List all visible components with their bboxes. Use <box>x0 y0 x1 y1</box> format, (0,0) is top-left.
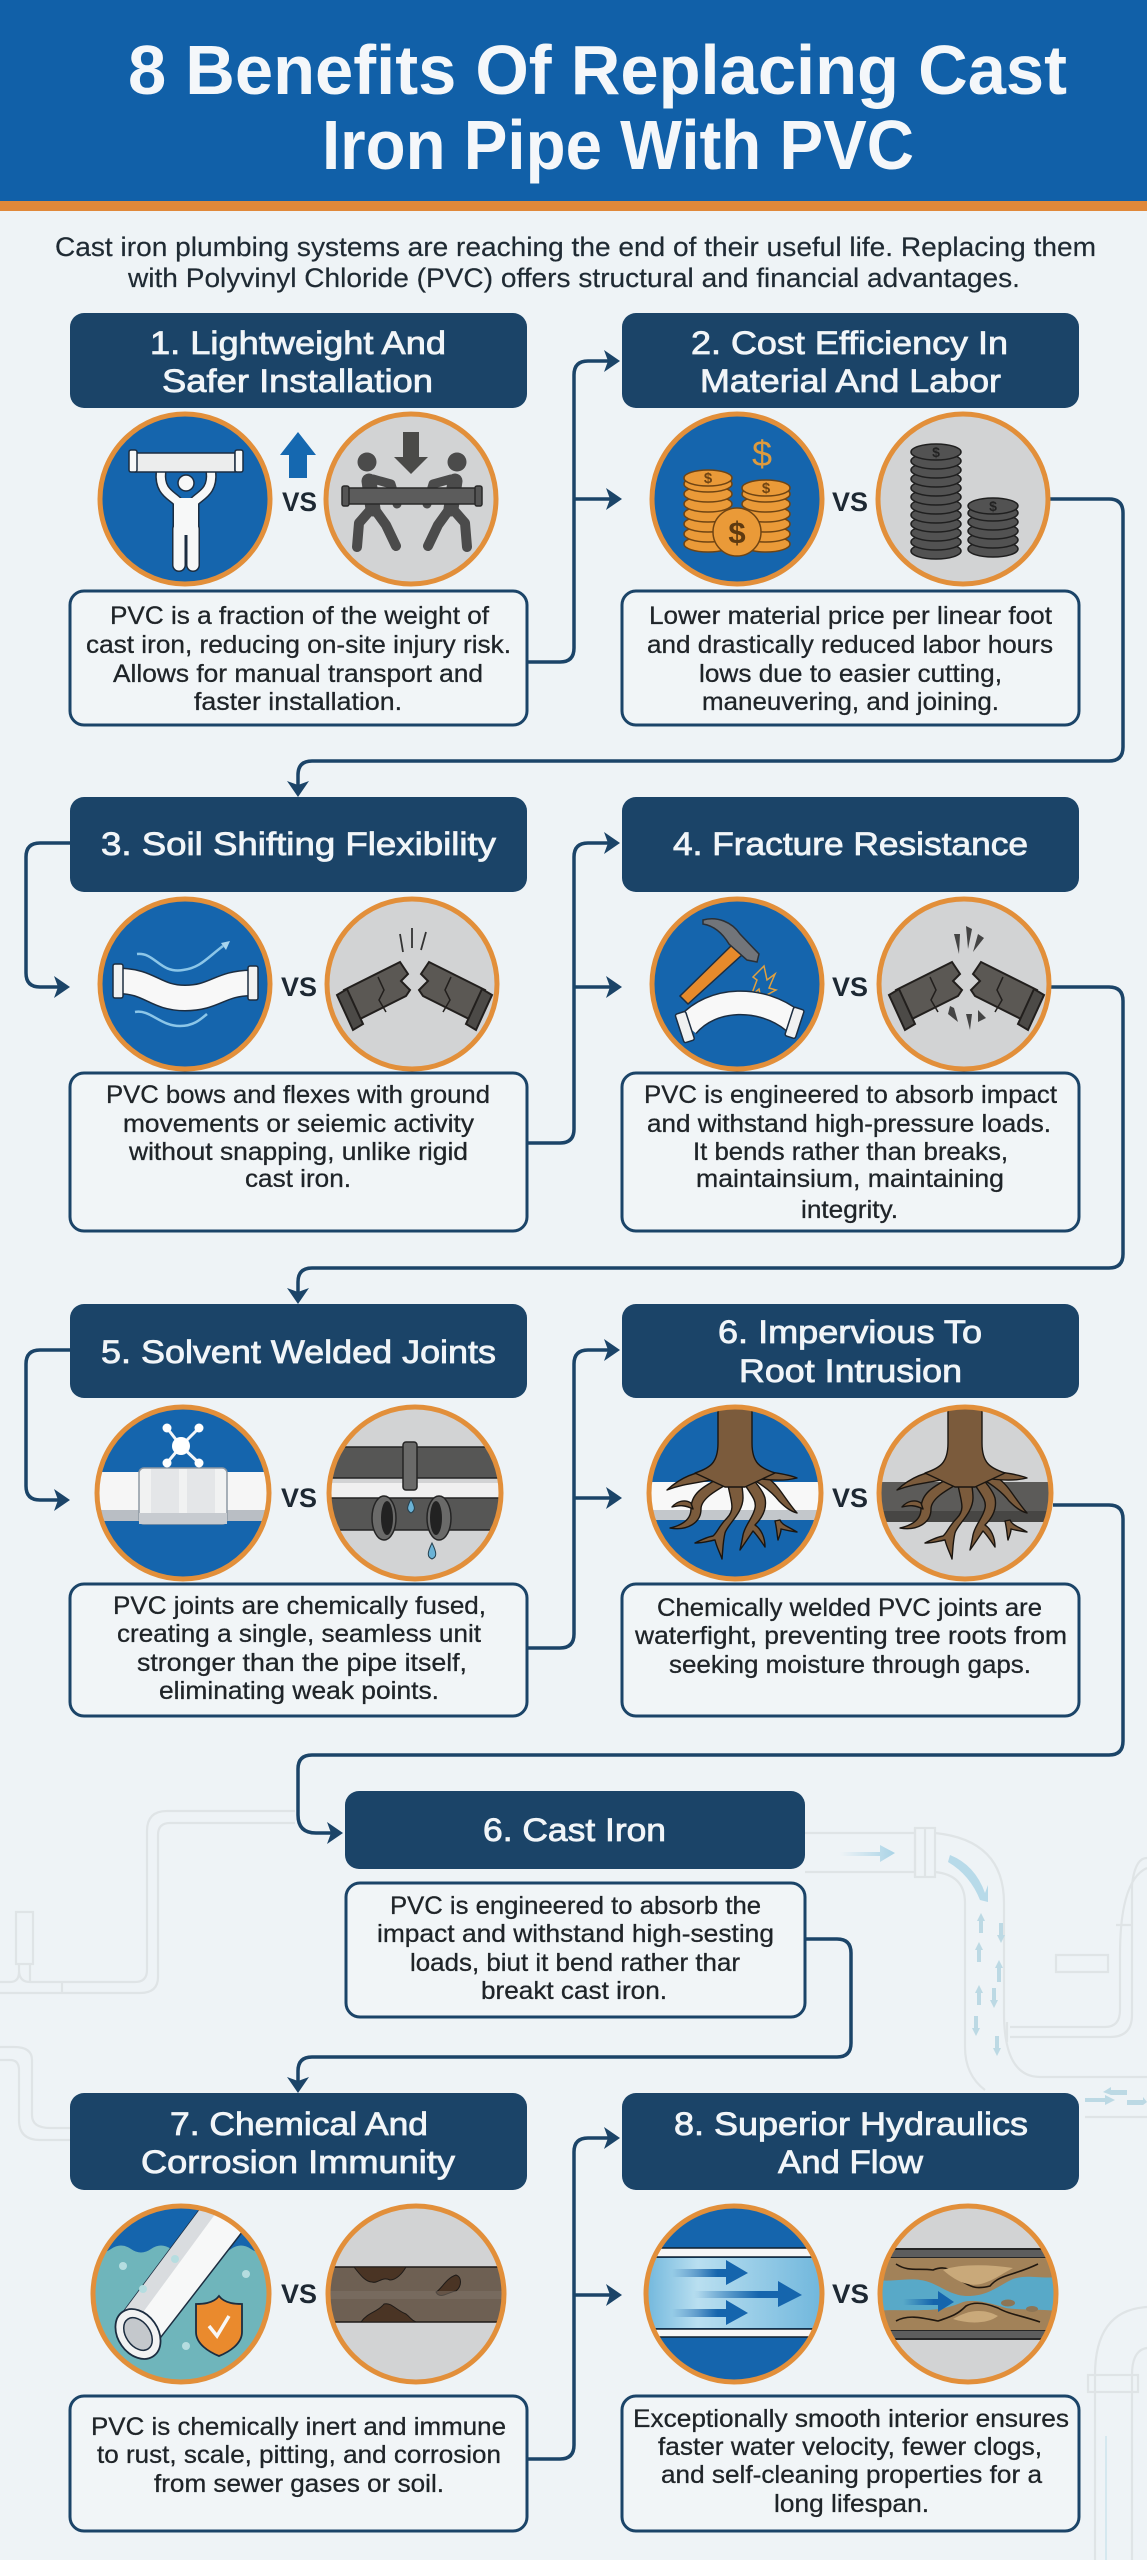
description: benefit 4: It bends rather than breaks, <box>693 1138 1008 1166</box>
description: benefit 4 <box>622 1073 1079 1231</box>
intro text: with Polyvinyl Chloride (PVC) offers structural and financial advantages. <box>127 263 1020 293</box>
description: benefit 4: maintainsium, maintaining <box>696 1165 1004 1193</box>
heading: benefit 6 <box>622 1304 1079 1398</box>
connector: card 7 to card 8 <box>527 2127 622 2459</box>
heading: benefit 8: 8. Superior Hydraulics <box>674 2106 1028 2142</box>
description: benefit 8: faster water velocity, fewer clogs, <box>658 2433 1042 2461</box>
description: benefit 7: to rust, scale, pitting, and corrosion <box>97 2441 501 2469</box>
description: cast iron: PVC is engineered to absorb the <box>390 1892 761 1920</box>
icon: flexing PVC pipe <box>100 899 270 1069</box>
connector: cast iron card to card 7 <box>287 1939 851 2093</box>
description: cast iron: impact and withstand high-sesting <box>377 1920 774 1948</box>
connector: card 6 to cast iron card <box>298 1505 1123 1844</box>
panel: benefit 3 <box>70 797 527 1231</box>
description: benefit 8: Exceptionally smooth interior ensures <box>633 2405 1069 2433</box>
panel: benefit 7 <box>70 2093 527 2531</box>
icon: orange coin stacks: $ <box>728 515 746 550</box>
description: benefit 7 <box>70 2396 527 2531</box>
description: benefit 2 <box>622 591 1079 725</box>
icon: orange coin stacks: $ <box>752 433 772 474</box>
title <box>128 31 1067 184</box>
heading: benefit 1: Safer Installation <box>162 363 433 399</box>
description: benefit 3: without snapping, unlike rigid <box>128 1138 468 1166</box>
label: VS: VS <box>281 2279 317 2309</box>
description: benefit 5: stronger than the pipe itself, <box>137 1649 467 1677</box>
panel: benefit 8 <box>622 2093 1079 2531</box>
heading: benefit 1 <box>70 313 527 408</box>
label: VS: VS <box>832 1483 868 1513</box>
description: benefit 8 <box>622 2396 1079 2531</box>
panel: benefit 4 <box>622 797 1079 1231</box>
heading: benefit 2: 2. Cost Efficiency In <box>691 325 1008 361</box>
icon: roots penetrating cast iron pipe <box>877 1393 1053 1581</box>
label: VS: VS <box>832 972 868 1002</box>
intro text <box>55 232 1096 293</box>
heading: benefit 5 <box>70 1304 527 1398</box>
heading: benefit 2: Material And Labor <box>700 363 1001 399</box>
panel: benefit 2 <box>622 313 1079 725</box>
heading: benefit 3 <box>70 797 527 892</box>
description: benefit 2: lows due to easier cutting, <box>699 660 1002 688</box>
heading: benefit 7: Corrosion Immunity <box>141 2144 455 2180</box>
description: benefit 4: integrity. <box>801 1196 898 1224</box>
connector: into card 3 icons <box>26 843 70 998</box>
heading: benefit 7 <box>70 2093 527 2190</box>
title: Iron Pipe With PVC <box>322 106 914 184</box>
description: benefit 5: creating a single, seamless unit <box>117 1620 481 1648</box>
icon: clogged cast iron flow <box>878 2204 1058 2384</box>
description: benefit 5 <box>70 1584 527 1716</box>
connector: into card 5 icons <box>26 1350 70 1511</box>
heading: benefit 2 <box>622 313 1079 408</box>
description: benefit 7: PVC is chemically inert and immune <box>91 2413 506 2441</box>
panel: cast iron <box>345 1791 805 2017</box>
background: faint flow arrows <box>840 1845 1147 2560</box>
label: VS: VS <box>281 972 317 1002</box>
connector: card 1 to card 2 <box>527 350 622 662</box>
description: benefit 1: PVC is a fraction of the weight of <box>110 602 489 630</box>
heading: benefit 7: 7. Chemical And <box>170 2106 428 2142</box>
icon: snapped cast iron pipe <box>327 899 497 1069</box>
connector: card 4 to card 5 <box>287 987 1123 1304</box>
label: VS: VS <box>832 2279 869 2309</box>
description: benefit 6: Chemically welded PVC joints are <box>657 1594 1042 1622</box>
icon: dark coin stacks: $ <box>932 444 940 460</box>
icon: leaking cast iron joint <box>327 1405 503 1581</box>
icon: orange coin stacks <box>652 414 822 584</box>
description: benefit 1 <box>70 591 527 725</box>
icon: fractured cast iron pipe <box>879 899 1049 1069</box>
icon: corroded cast iron pipe <box>326 2204 506 2384</box>
icon: up arrow <box>280 432 316 478</box>
heading: benefit 8 <box>622 2093 1079 2190</box>
icon: orange coin stacks: $ <box>762 480 771 497</box>
description: benefit 8: long lifespan. <box>774 2490 929 2518</box>
heading: benefit 1: 1. Lightweight And <box>150 325 446 361</box>
icon: dark coin stacks <box>878 414 1048 584</box>
icon: PVC pipe in water with shield <box>91 2189 271 2384</box>
icon: two people carrying cast iron pipe <box>326 414 496 584</box>
description: cast iron: loads, biut it bend rather thar <box>410 1949 740 1977</box>
description: benefit 1: cast iron, reducing on-site injury risk. <box>86 631 511 659</box>
heading: benefit 5: 5. Solvent Welded Joints <box>101 1334 496 1370</box>
description: benefit 3: cast iron. <box>245 1165 351 1193</box>
header band <box>0 0 1147 211</box>
heading: cast iron: 6. Cast Iron <box>483 1812 666 1848</box>
heading: benefit 4: 4. Fracture Resistance <box>673 826 1028 862</box>
icon: dark coin stacks: $ <box>989 498 997 514</box>
description: benefit 2: maneuvering, and joining. <box>702 688 999 716</box>
description: benefit 6 <box>622 1584 1079 1716</box>
heading: benefit 3: 3. Soil Shifting Flexibility <box>101 826 496 862</box>
description: cast iron: breakt cast iron. <box>481 1977 667 2005</box>
icon: hammer on flexible PVC pipe <box>652 899 822 1069</box>
description: benefit 1: faster installation. <box>194 688 402 716</box>
heading: benefit 6: 6. Impervious To <box>718 1314 982 1350</box>
icon: orange coin stacks: $ <box>704 470 713 487</box>
heading: benefit 8: And Flow <box>778 2144 924 2180</box>
connector: card 5 to card 6 <box>527 1339 622 1648</box>
description: benefit 2: and drastically reduced labor hours <box>647 631 1053 659</box>
description: benefit 3 <box>70 1073 527 1231</box>
heading: benefit 6: Root Intrusion <box>739 1353 962 1389</box>
description: benefit 3: PVC bows and flexes with ground <box>106 1081 490 1109</box>
background: faint pipes <box>0 1811 1147 2560</box>
description: benefit 6: waterfight, preventing tree roots from <box>634 1622 1067 1650</box>
description: benefit 4: and withstand high-pressure loads. <box>647 1110 1051 1138</box>
panel: benefit 1 <box>70 313 527 725</box>
label: VS: VS <box>832 487 868 517</box>
description: benefit 7: from sewer gases or soil. <box>154 2470 444 2498</box>
connector: card 2 to card 3 <box>287 499 1123 797</box>
description: cast iron <box>346 1883 805 2017</box>
description: benefit 5: eliminating weak points. <box>159 1677 439 1705</box>
icon: smooth PVC flow <box>644 2204 824 2384</box>
description: benefit 1: Allows for manual transport and <box>113 660 483 688</box>
label: VS: VS <box>281 1483 317 1513</box>
description: benefit 3: movements or seiemic activity <box>123 1110 475 1138</box>
heading: cast iron <box>345 1791 805 1869</box>
panel: benefit 5 <box>70 1304 527 1716</box>
intro text: Cast iron plumbing systems are reaching the end of their useful life. Replacing them <box>55 232 1096 262</box>
heading: benefit 4 <box>622 797 1079 892</box>
description: benefit 2: Lower material price per linear foot <box>649 602 1052 630</box>
panel: benefit 6 <box>622 1304 1079 1716</box>
description: benefit 8: and self-cleaning properties for a <box>661 2461 1042 2489</box>
icon: person lifting PVC pipe <box>100 414 270 584</box>
description: benefit 6: seeking moisture through gaps. <box>669 1651 1031 1679</box>
icon: solvent welded PVC joint <box>95 1405 271 1581</box>
description: benefit 4: PVC is engineered to absorb impact <box>644 1081 1057 1109</box>
title: 8 Benefits Of Replacing Cast <box>128 31 1067 109</box>
connector: card 3 to card 4 <box>527 832 622 1143</box>
icon: roots around PVC pipe <box>647 1393 823 1581</box>
label: VS: VS <box>282 487 317 517</box>
description: benefit 5: PVC joints are chemically fused, <box>113 1592 486 1620</box>
